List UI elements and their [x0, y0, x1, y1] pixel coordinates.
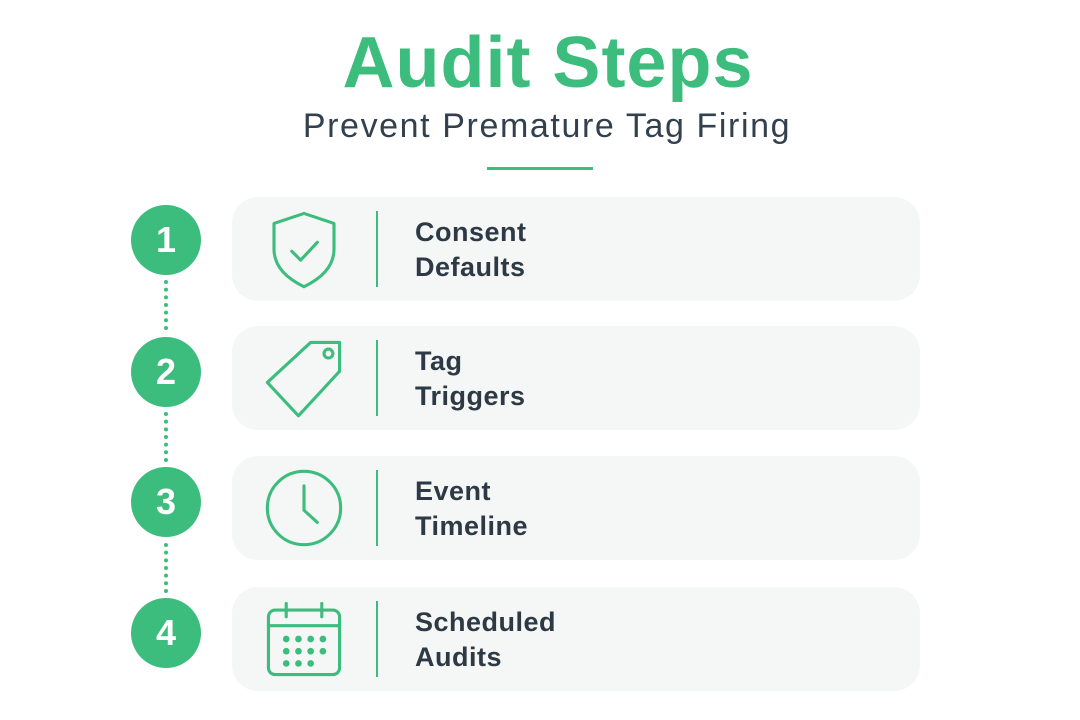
connector dots 1-2	[164, 280, 172, 330]
step number 2: 2	[156, 351, 176, 392]
text: Tag Triggers: Tag	[415, 346, 462, 376]
step number 4: 4	[156, 612, 176, 653]
card: consent defaults	[232, 197, 920, 301]
card: scheduled audits	[232, 587, 920, 691]
card: tag triggers	[232, 326, 920, 430]
step number 3: 3	[156, 481, 176, 522]
subtitle: Prevent Premature Tag Firing	[303, 107, 791, 145]
step number 1	[131, 205, 201, 275]
step number 2	[131, 337, 201, 407]
text: Consent Defaults	[415, 217, 526, 282]
text: Tag Triggers	[415, 346, 526, 411]
text: Consent Defaults: Defaults	[415, 252, 526, 282]
text: Event Timeline	[415, 476, 528, 541]
step number 1: 1	[156, 219, 176, 260]
text: Consent Defaults: Consent	[415, 217, 526, 247]
card: event timeline	[232, 456, 920, 560]
underline	[487, 167, 593, 170]
text: Event Timeline: Event	[415, 476, 491, 506]
text: Scheduled Audits: Scheduled	[415, 607, 556, 637]
title: Audit Steps	[342, 23, 754, 103]
text: Event Timeline: Timeline	[415, 511, 528, 541]
step number 4	[131, 598, 201, 668]
text: Scheduled Audits	[415, 607, 556, 672]
step number 3	[131, 467, 201, 537]
connector dots 3-4	[164, 543, 172, 593]
text: Tag Triggers: Triggers	[415, 381, 526, 411]
connector dots 2-3	[164, 412, 172, 462]
icon: calendar	[266, 602, 342, 676]
icon: clock	[266, 470, 342, 546]
text: Scheduled Audits: Audits	[415, 642, 502, 672]
icon: shield	[272, 212, 336, 288]
icon: tag	[266, 340, 342, 418]
